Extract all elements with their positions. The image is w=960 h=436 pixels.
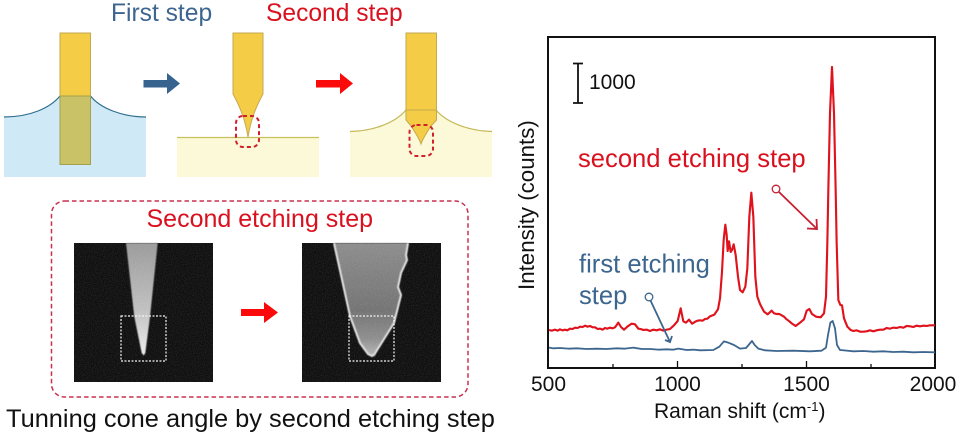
heading: Second step: Second step xyxy=(266,0,403,27)
panel: second etching step xyxy=(52,201,468,397)
leader: first etching step xyxy=(645,293,672,342)
arrow: red between SEM images xyxy=(241,302,278,323)
x axis title: Raman shift (cm xyxy=(654,400,807,423)
dashed highlight on cone xyxy=(410,125,433,156)
scale bar xyxy=(573,64,583,103)
axis ticks xyxy=(613,361,871,368)
dashed white inset square xyxy=(349,316,394,361)
SEM image: before xyxy=(74,243,213,382)
x axis labels: 1500 xyxy=(783,373,830,396)
panel dashed border xyxy=(52,201,468,397)
diagram: first step tip in etchant xyxy=(4,33,146,177)
heading: First step: First step xyxy=(111,0,212,27)
x axis labels: 1000 xyxy=(654,373,701,396)
sharpened tip xyxy=(233,33,263,137)
arrow: red second step xyxy=(316,73,353,94)
etchant meniscus xyxy=(350,110,492,132)
dashed white inset square xyxy=(121,316,166,361)
diagram: tip during second step xyxy=(350,33,492,177)
etchant surface xyxy=(177,136,319,138)
panel heading: Second etching step xyxy=(146,205,373,233)
plot frame xyxy=(548,37,935,368)
scale label: 1000 xyxy=(589,71,636,94)
caption: Tunning cone angle by second etching step xyxy=(6,405,495,433)
etchant meniscus xyxy=(4,96,146,117)
label: second etching step: second etching step xyxy=(578,145,806,173)
series: first etching step xyxy=(549,321,935,352)
x axis labels: 500 xyxy=(531,373,566,396)
tip above liquid xyxy=(60,33,90,96)
x axis labels xyxy=(531,373,956,396)
tip immersed with cone xyxy=(406,110,436,144)
x axis title: ) xyxy=(818,400,825,423)
x axis labels: 2000 xyxy=(910,373,956,396)
x axis title: -1 xyxy=(807,399,818,414)
SEM image: after xyxy=(302,243,441,382)
arrow: blue first step xyxy=(144,73,180,94)
label: first etching step: step xyxy=(579,282,627,310)
blue etchant pool xyxy=(4,96,146,177)
chart: Raman spectra xyxy=(514,37,956,423)
leader: second etching step xyxy=(772,185,817,229)
diagram: tip after first step xyxy=(177,33,319,177)
series: second etching step xyxy=(549,67,935,332)
label: first etching step: first etching xyxy=(579,250,710,278)
pale yellow etchant pool xyxy=(350,110,492,177)
pale yellow etchant pool xyxy=(177,138,319,177)
tip immersed in liquid xyxy=(60,96,90,164)
tip shaft xyxy=(406,33,436,110)
y axis title: Intensity (counts) xyxy=(514,120,539,290)
dashed highlight on tip apex xyxy=(236,116,259,147)
